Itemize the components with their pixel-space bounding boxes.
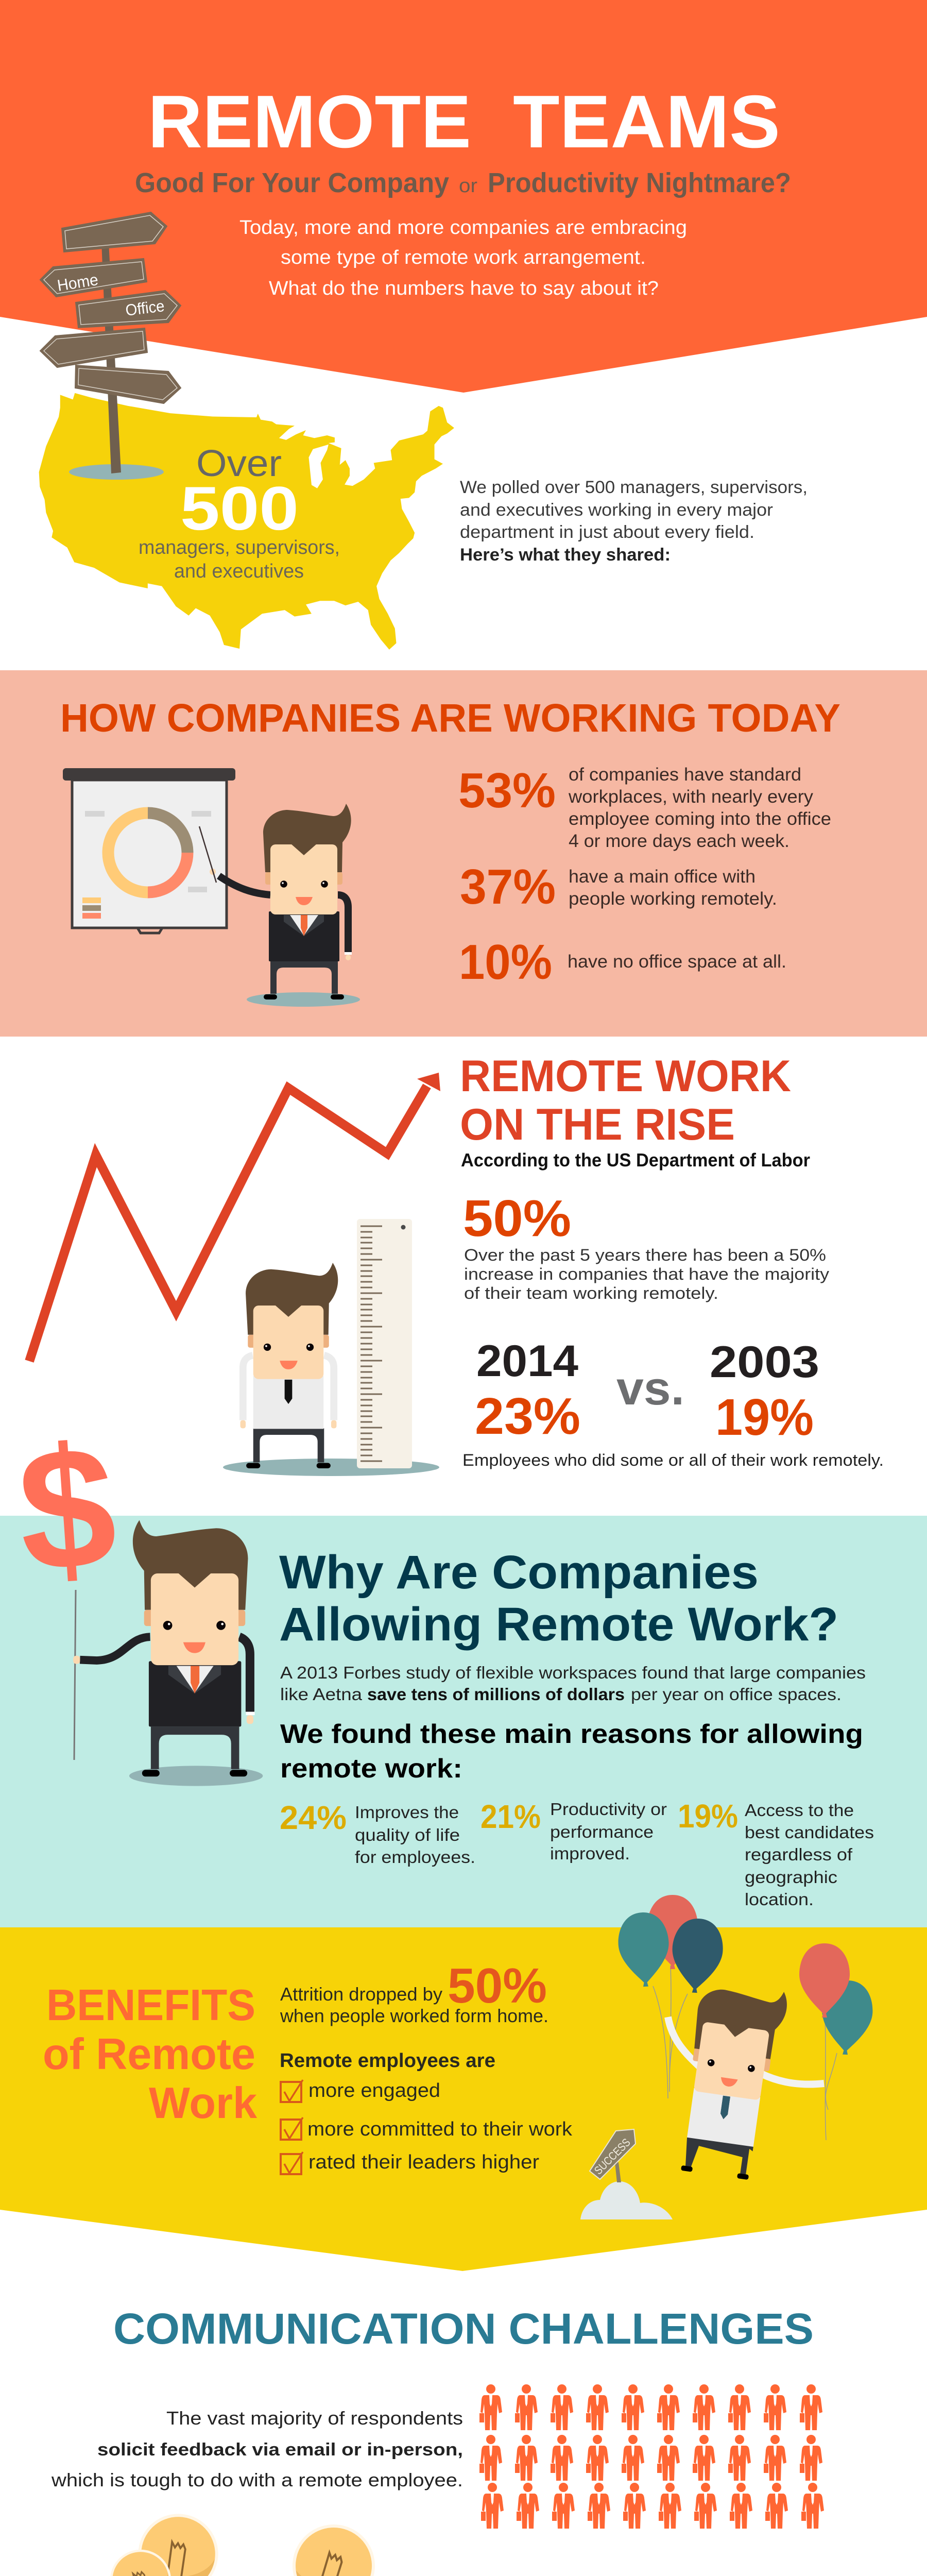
text block: poll description: department in just about every field. (460, 522, 754, 542)
stat 24%: quality of life (355, 1825, 460, 1844)
subtitle: or (459, 175, 477, 197)
stat 10% (459, 935, 786, 990)
icon: dollar balloon (12, 1409, 122, 1760)
text block: Forbes study: A 2013 Forbes study of flexible workspaces found that large companies (280, 1663, 866, 1682)
intro text (239, 217, 687, 299)
character: presenter in suit (219, 804, 360, 1007)
stat 21%: 21% (480, 1798, 541, 1835)
comparison 2014 vs 2003: 2003 (710, 1337, 819, 1387)
text block: poll description: We polled over 500 managers, supervisors, (460, 478, 808, 497)
heading (43, 1981, 258, 2128)
title: TEAMS (513, 80, 780, 163)
heading: ON THE RISE (460, 1100, 735, 1149)
stat 24% (280, 1799, 475, 1867)
icon: dollar balloon: $ (12, 1409, 122, 1608)
text block: Forbes study: per year on office spaces. (631, 1685, 842, 1704)
subtitle: Productivity Nightmare? (488, 167, 791, 198)
heading: BENEFITS (46, 1981, 255, 2030)
checklist: remote employees are: rated their leaders higher (308, 2151, 539, 2173)
US map with stat (39, 393, 454, 650)
character: man in shirt by ruler (241, 1263, 338, 1468)
US map with stat: and executives (174, 561, 304, 582)
intro text: What do the numbers have to say about it? (269, 278, 659, 299)
stat: attrition 50%: Attrition dropped by (280, 1984, 442, 2005)
heading: Allowing Remote Work? (279, 1598, 838, 1651)
character: man floating with balloons (668, 1980, 824, 2182)
stat 19%: 19% (678, 1798, 738, 1835)
stat 21% (480, 1798, 667, 1863)
icon: light bulb balloons (103, 2510, 385, 2576)
subheading: We found these main reasons for allowing (280, 1719, 863, 1749)
checklist: remote employees are (280, 2050, 573, 2174)
stat 53%: of companies have standard (569, 765, 801, 785)
stat 19%: Access to the (745, 1801, 854, 1820)
stat 19%: location. (745, 1890, 814, 1909)
stat 21%: performance (550, 1822, 654, 1841)
panel: benefits of remote work (0, 1895, 927, 2271)
heading: REMOTE WORK (460, 1052, 791, 1101)
text block: feedback: solicit feedback via email or in-person, (97, 2440, 463, 2460)
comparison 2014 vs 2003: 23% (475, 1387, 580, 1445)
icon: balloons left (617, 1895, 725, 2098)
icon: success sign on cloud (580, 2129, 673, 2219)
intro text: Today, more and more companies are embracing (239, 217, 687, 239)
stat 50%: 50% (463, 1190, 571, 1247)
stat: attrition 50%: 50% (448, 1958, 547, 2013)
heading: Why Are Companies (279, 1546, 759, 1599)
heading: Work (149, 2079, 258, 2128)
US map with stat: 500 (180, 474, 299, 543)
stat 19% (678, 1798, 874, 1909)
stat 21%: improved. (550, 1844, 630, 1863)
stat 24%: for employees. (355, 1848, 475, 1867)
stat 53% (458, 763, 831, 851)
stat 37%: have a main office with (569, 867, 756, 887)
panel: how companies are working today (0, 670, 927, 1037)
comparison 2014 vs 2003: 2014 (476, 1336, 578, 1386)
US map with stat: managers, supervisors, (139, 537, 340, 558)
title: REMOTE (148, 80, 471, 163)
stat 53%: workplaces, with nearly every (568, 787, 814, 807)
stat 19%: geographic (745, 1868, 837, 1887)
stat 50% (463, 1190, 829, 1302)
stat 53%: 53% (458, 763, 556, 818)
icon: signpost: Home (56, 270, 99, 295)
stat 21%: Productivity or (550, 1800, 667, 1819)
stat 53%: employee coming into the office (569, 809, 831, 829)
stat 24%: 24% (280, 1799, 347, 1836)
text block: Forbes study: save tens of millions of dollars (367, 1685, 625, 1704)
stat 37%: 37% (460, 859, 556, 914)
checklist: remote employees are: more engaged (308, 2080, 440, 2102)
stat 10%: have no office space at all. (568, 952, 786, 972)
stat 37%: people working remotely. (569, 889, 777, 909)
subheading: remote work: (280, 1754, 462, 1784)
stat 19%: regardless of (745, 1845, 853, 1864)
stat 50%: of their team working remotely. (464, 1284, 718, 1302)
checklist: remote employees are: Remote employees are (280, 2050, 495, 2072)
stat 53%: 4 or more days each week. (569, 831, 789, 851)
stat 50%: Over the past 5 years there has been a 50% (464, 1246, 826, 1264)
text block: poll description: and executives working in every major (460, 500, 773, 520)
icon array: 30 people (479, 2384, 824, 2529)
text block: feedback (51, 2408, 463, 2490)
icon: signpost: Office (125, 297, 165, 319)
intro text: some type of remote work arrangement. (281, 247, 646, 268)
title (148, 80, 780, 163)
comparison 2014 vs 2003: vs. (616, 1362, 684, 1415)
icon: presentation board with donut chart (63, 768, 235, 933)
text block: poll description: Here’s what they shared: (460, 545, 671, 565)
icon: balloons right (799, 1943, 874, 2140)
subheading (280, 1719, 863, 1784)
heading: HOW COMPANIES ARE WORKING TODAY (60, 696, 840, 740)
stat: attrition 50%: when people worked form home. (280, 2005, 548, 2026)
stat 37% (460, 859, 777, 914)
comparison 2014 vs 2003: Employees who did some or all of their work remotely. (462, 1451, 884, 1469)
stat 24%: Improves the (355, 1803, 459, 1822)
text block: poll description (460, 478, 808, 565)
US map with stat: Over (196, 443, 282, 484)
subtitle (135, 167, 791, 198)
subtitle: Good For Your Company (135, 167, 449, 198)
text block: feedback: which is tough to do with a remote employee. (51, 2469, 463, 2490)
character: man in suit holding balloon (73, 1520, 263, 1786)
panel: why companies allow remote work (0, 1409, 927, 1928)
heading: of Remote (43, 2030, 255, 2079)
text block: Forbes study (280, 1663, 866, 1704)
stat 19%: best candidates (745, 1823, 874, 1842)
icon: signpost (40, 212, 181, 480)
text block: Forbes study: like Aetna (280, 1685, 363, 1704)
icon: shadow and ruler (223, 1219, 439, 1476)
checklist: remote employees are: more committed to their work (307, 2119, 573, 2140)
stat 50%: increase in companies that have the majority (464, 1265, 829, 1283)
comparison 2014 vs 2003 (462, 1336, 884, 1469)
subheading: According to the US Department of Labor (461, 1149, 810, 1171)
heading (460, 1052, 791, 1149)
text block: feedback: The vast majority of respondents (166, 2408, 463, 2429)
heading (279, 1546, 838, 1651)
section: communication challenges (51, 2304, 890, 2576)
stat: attrition 50% (280, 1958, 548, 2026)
icon: success sign on cloud: SUCCESS (592, 2136, 633, 2177)
section: remote work on the rise (29, 1052, 884, 1476)
stat 10%: 10% (459, 935, 552, 990)
chart: rising zigzag arrow (29, 1073, 440, 1361)
panel: header (0, 0, 927, 393)
heading: COMMUNICATION CHALLENGES (113, 2304, 814, 2353)
comparison 2014 vs 2003: 19% (715, 1388, 814, 1446)
